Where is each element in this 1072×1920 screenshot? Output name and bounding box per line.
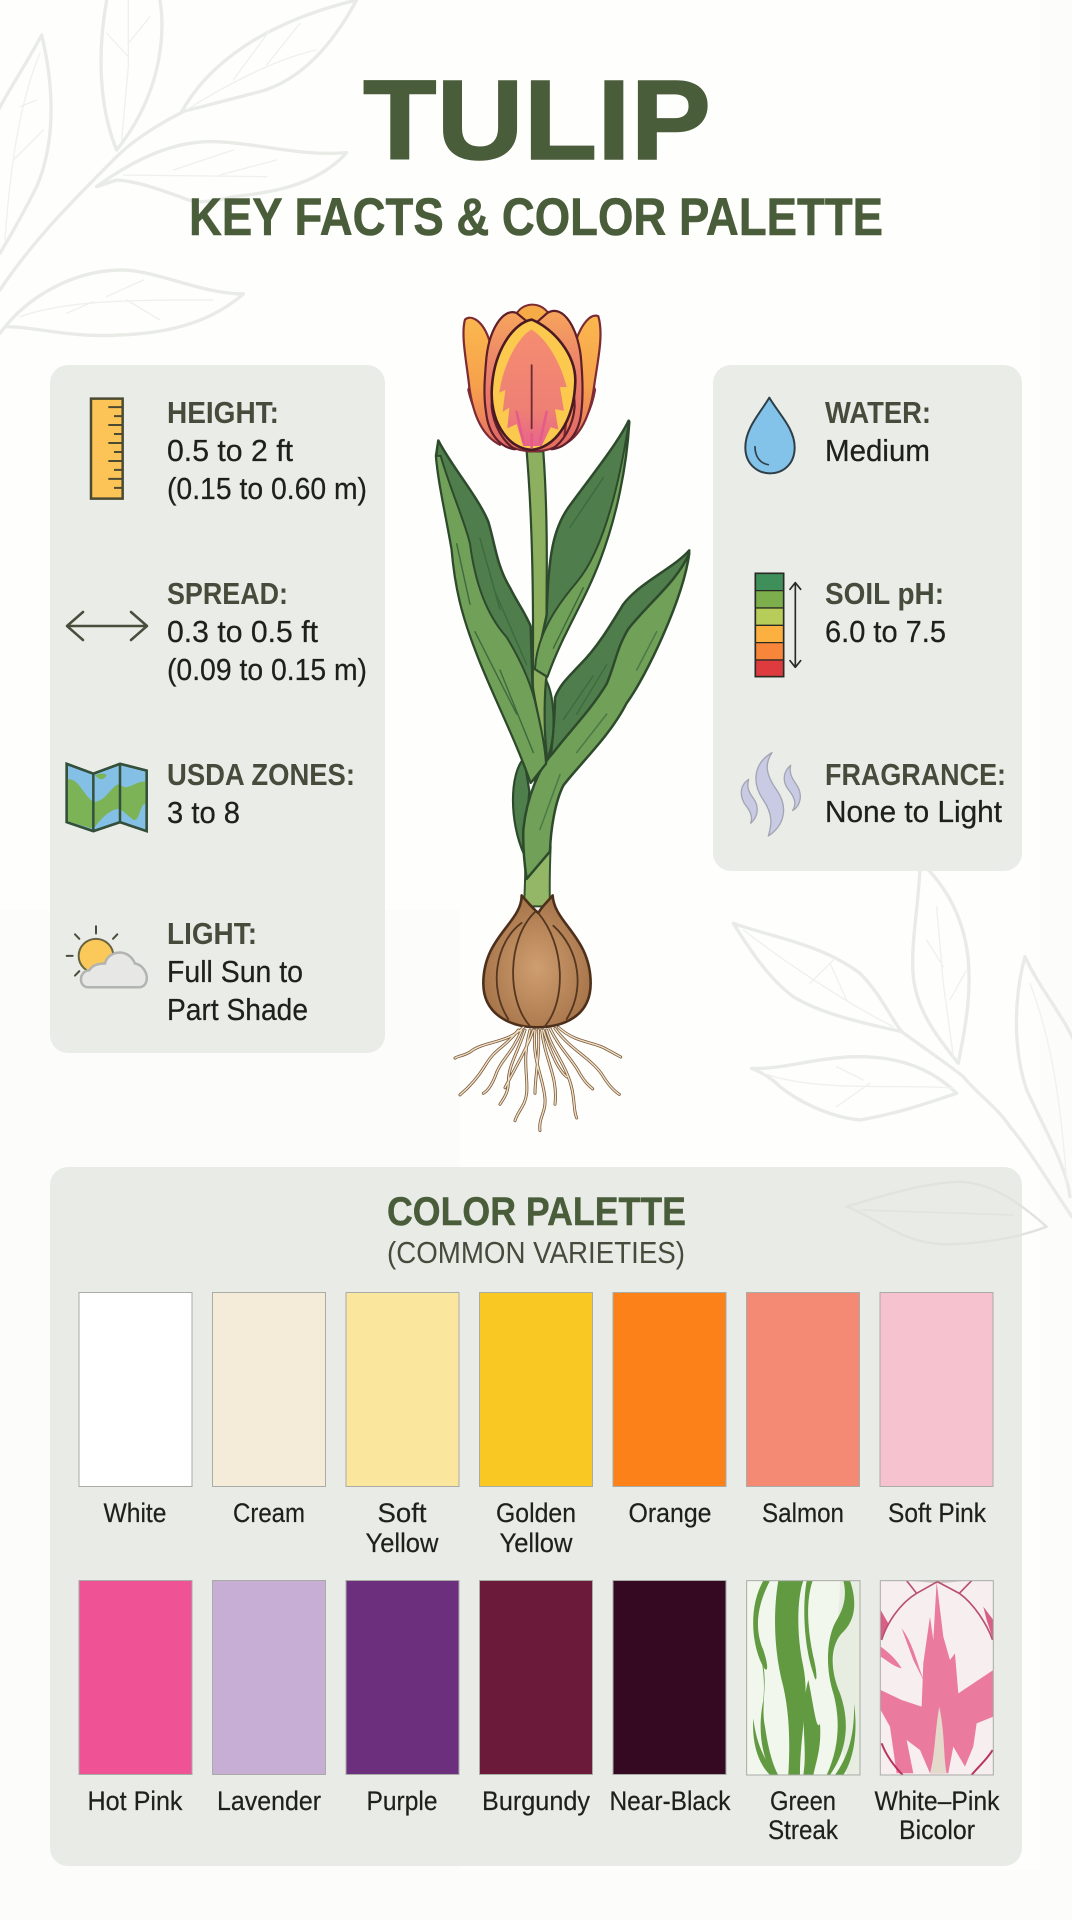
illustration: tulip plant <box>436 305 689 1131</box>
light text: Full Sun to <box>167 954 303 989</box>
lower right leaf <box>523 550 689 879</box>
swatch: orange: Orange <box>628 1498 712 1528</box>
height text <box>167 395 367 506</box>
water text: Medium <box>825 433 930 468</box>
decorative leaf branch: lower right <box>733 862 1072 1217</box>
icon: water drop <box>745 398 795 473</box>
swatch: golden yellow <box>480 1292 592 1558</box>
light text: Part Shade <box>167 992 308 1027</box>
bulb <box>483 895 591 1027</box>
water text: WATER: <box>825 395 931 430</box>
icon: sun and cloud <box>67 926 147 987</box>
USDA zones text: 3 to 8 <box>167 795 240 830</box>
fragrance text: FRAGRANCE: <box>825 757 1006 792</box>
spread text: (0.09 to 0.15 m) <box>167 652 367 687</box>
flower <box>463 305 601 451</box>
panel: color palette <box>50 1167 1047 1866</box>
left leaf <box>436 440 546 783</box>
icon: fragrance wisps <box>741 753 800 836</box>
icon: spread arrow <box>67 612 147 640</box>
swatch: salmon <box>746 1292 860 1528</box>
swatch: green streak: Streak <box>768 1815 838 1845</box>
top centre back petal <box>515 305 551 346</box>
icon: map <box>67 764 147 831</box>
swatch: burgundy: Burgundy <box>482 1786 590 1816</box>
swatch: golden yellow: Golden <box>496 1498 576 1528</box>
swatch: soft pink <box>880 1292 993 1528</box>
swatch: lavender <box>212 1580 326 1816</box>
swatch: soft yellow: Soft <box>378 1498 427 1528</box>
mid right petal <box>535 311 583 449</box>
spread text: SPREAD: <box>167 576 288 611</box>
fragrance text <box>825 757 1006 829</box>
swatch: salmon: Salmon <box>762 1498 844 1528</box>
icon: ruler <box>91 399 123 499</box>
swatch: white-pink bicolor: White–Pink <box>874 1786 1000 1816</box>
icon: soil pH scale <box>755 573 801 677</box>
height text: (0.15 to 0.60 m) <box>167 471 367 506</box>
USDA zones text: USDA ZONES: <box>167 757 355 792</box>
spread text <box>167 576 367 687</box>
roots <box>455 1027 621 1131</box>
panel: plant size and growing facts <box>50 365 385 1053</box>
USDA zones text <box>167 757 355 830</box>
swatch: white-pink bicolor <box>874 1581 1000 1845</box>
outer left petal <box>463 318 500 445</box>
swatch: soft yellow: Yellow <box>366 1528 439 1558</box>
swatch: white-pink bicolor: Bicolor <box>899 1815 975 1845</box>
mid left petal <box>484 312 530 449</box>
swatch: hot pink: Hot Pink <box>88 1786 183 1816</box>
lower stem <box>524 846 551 906</box>
fragrance text: None to Light <box>825 794 1002 829</box>
swatch: near-black: Near-Black <box>610 1786 731 1816</box>
swatch: purple: Purple <box>366 1786 438 1816</box>
swatch: orange <box>613 1292 726 1528</box>
swatch: hot pink <box>79 1580 192 1816</box>
swatch: golden yellow: Yellow <box>500 1528 573 1558</box>
front petal <box>492 320 575 450</box>
palette subheading: (COMMON VARIETIES) <box>387 1235 685 1270</box>
swatch: purple <box>346 1580 459 1816</box>
light text <box>167 916 308 1027</box>
swatch: white <box>79 1292 192 1528</box>
swatch: green streak: Green <box>770 1786 836 1816</box>
stem <box>527 451 547 786</box>
light text: LIGHT: <box>167 916 257 951</box>
upper right leaf <box>535 421 629 677</box>
base bowl <box>468 340 595 451</box>
outer right petal <box>563 316 601 445</box>
swatch: cream: Cream <box>233 1498 305 1528</box>
soil pH text: SOIL pH: <box>825 576 944 611</box>
swatch: cream <box>212 1292 326 1528</box>
swatch: burgundy <box>480 1580 592 1816</box>
panel: water, soil and fragrance <box>713 365 1022 871</box>
decorative leaf over palette panel <box>847 1182 1047 1244</box>
swatch: soft yellow <box>346 1292 459 1558</box>
palette heading: COLOR PALETTE <box>387 1190 686 1234</box>
swatch: white: White <box>104 1498 166 1528</box>
height text: HEIGHT: <box>167 395 279 430</box>
subtitle: KEY FACTS & COLOR PALETTE <box>189 188 883 247</box>
height text: 0.5 to 2 ft <box>167 433 293 468</box>
spread text: 0.3 to 0.5 ft <box>167 614 318 649</box>
decorative leaf branch: top left <box>0 0 357 336</box>
water text <box>825 395 931 468</box>
stem sheath <box>545 680 554 759</box>
swatch: near-black <box>610 1580 731 1816</box>
back leaf at base <box>513 758 529 854</box>
title: TULIP <box>363 57 711 183</box>
swatch: lavender: Lavender <box>217 1786 321 1816</box>
swatch: green streak <box>747 1581 860 1845</box>
soil pH text <box>825 576 946 649</box>
swatch: soft pink: Soft Pink <box>888 1498 986 1528</box>
soil pH text: 6.0 to 7.5 <box>825 614 946 649</box>
